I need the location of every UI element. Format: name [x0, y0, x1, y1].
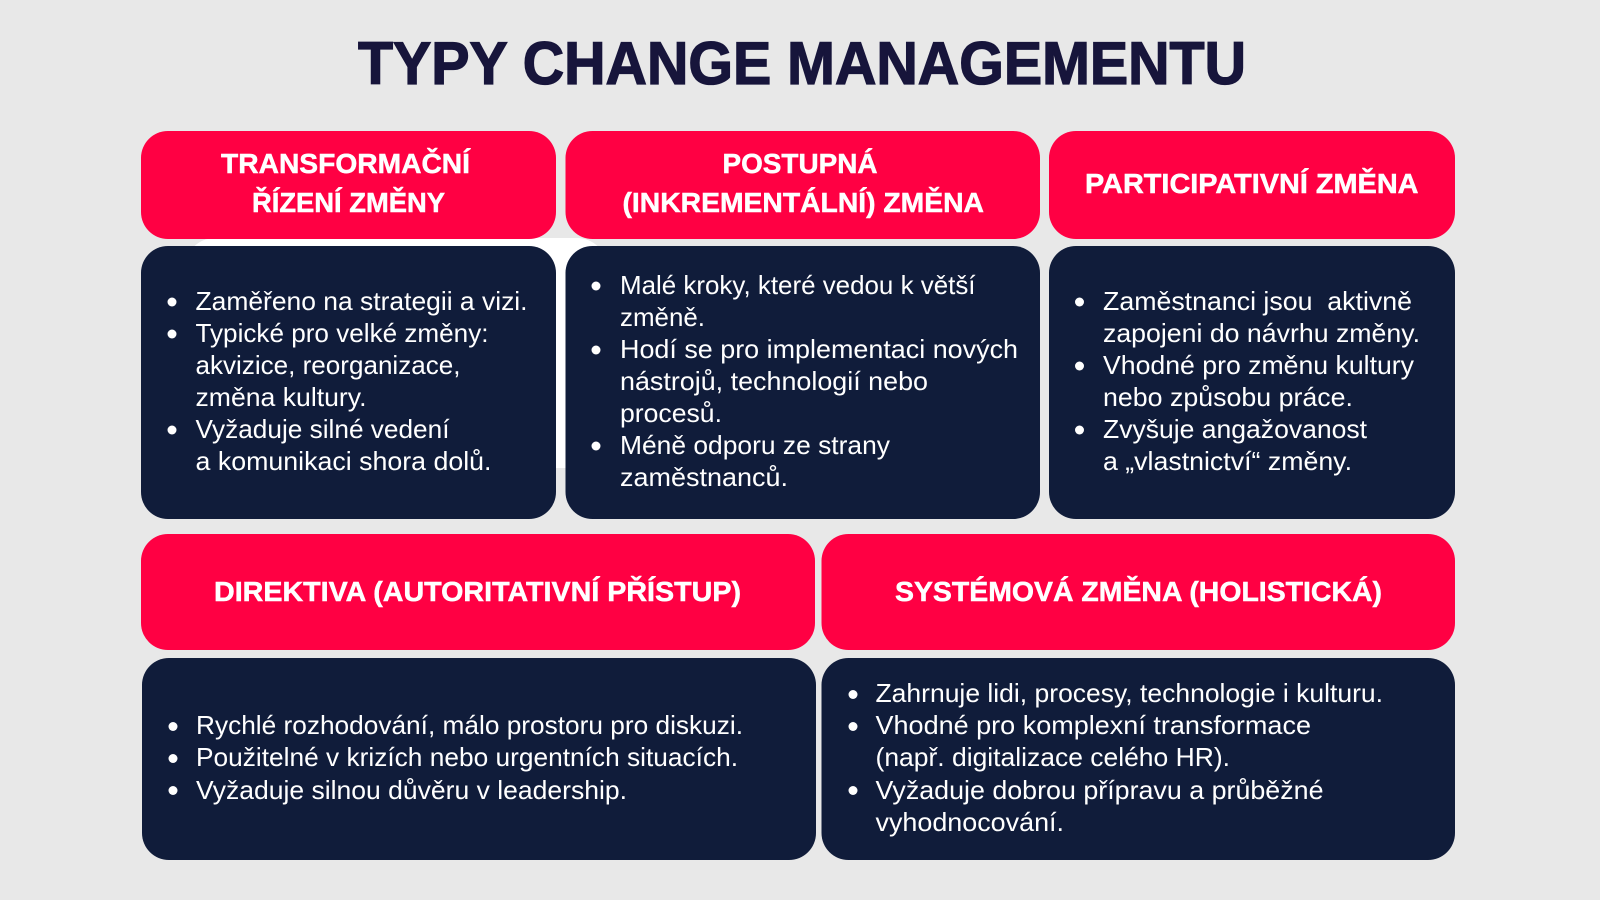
text block: direktiva body: Vyžaduje silnou důvěru v leadership. [196, 775, 627, 805]
text block: transformační body: Typické pro velké změny: [196, 318, 488, 348]
heading: postupná změna: POSTUPNÁ [722, 148, 878, 179]
text block: postupná body: Malé kroky, které vedou k větší [620, 270, 976, 300]
panel: transformační řízení změny [141, 131, 556, 519]
panel: participativní změna [1049, 131, 1455, 519]
text block: postupná body [566, 246, 1040, 519]
text block: participativní body: a „vlastnictví“ změny. [1103, 446, 1352, 476]
text block: direktiva body: Rychlé rozhodování, málo prostoru pro diskuzi. [196, 710, 743, 740]
heading: systémová změna: SYSTÉMOVÁ ZMĚNA (HOLISTICKÁ) [895, 576, 1382, 607]
text block: postupná body: Méně odporu ze strany [620, 430, 890, 460]
text block: direktiva body [142, 658, 816, 860]
heading: transformační řízení změny [141, 131, 556, 239]
text block: participativní body: zapojeni do návrhu změny. [1103, 318, 1420, 348]
text block: participativní body: Zvyšuje angažovanost [1103, 414, 1368, 444]
text block: systémová body [822, 658, 1455, 860]
heading: systémová změna [822, 534, 1455, 650]
text block: direktiva body: Použitelné v krizích nebo urgentních situacích. [196, 742, 738, 772]
text block: transformační body: Zaměřeno na strategii a vizi. [196, 286, 528, 316]
panel: postupná změna [566, 131, 1040, 519]
text block: transformační body: změna kultury. [196, 382, 366, 412]
heading: postupná změna: (INKREMENTÁLNÍ) ZMĚNA [622, 187, 984, 218]
text block: postupná body: zaměstnanců. [620, 462, 788, 492]
text block: postupná body: změně. [620, 302, 705, 332]
text block: participativní body: Zaměstnanci jsou aktivně [1103, 286, 1412, 316]
text block: postupná body: procesů. [620, 398, 722, 428]
panel: systémová změna [822, 534, 1455, 860]
heading: transformační řízení změny: TRANSFORMAČNÍ [221, 147, 471, 179]
text block: systémová body: Zahrnuje lidi, procesy, technologie i kulturu. [876, 678, 1383, 708]
text block: participativní body: nebo způsobu práce. [1103, 382, 1353, 412]
heading: direktiva [141, 534, 815, 650]
panel: direktiva [141, 534, 816, 860]
text block: postupná body: nástrojů, technologií nebo [620, 366, 928, 396]
text block: systémová body: Vyžaduje dobrou přípravu a průběžné [876, 775, 1324, 805]
text block: transformační body: a komunikaci shora dolů. [196, 446, 492, 476]
text block: systémová body: vyhodnocování. [876, 807, 1064, 837]
heading: transformační řízení změny: ŘÍZENÍ ZMĚNY [252, 187, 445, 218]
text block: systémová body: Vhodné pro komplexní transformace [876, 710, 1311, 740]
text block: transformační body: Vyžaduje silné vedení [196, 414, 450, 444]
text block: postupná body: Hodí se pro implementaci nových [620, 334, 1018, 364]
text block: transformační body: akvizice, reorganizace, [196, 350, 460, 380]
heading: direktiva: DIREKTIVA (AUTORITATIVNÍ PŘÍSTUP) [214, 576, 741, 607]
heading: postupná změna [566, 131, 1040, 239]
heading: participativní změna [1049, 131, 1455, 239]
heading: participativní změna: PARTICIPATIVNÍ ZMĚNA [1085, 168, 1418, 199]
text block: systémová body: (např. digitalizace celého HR). [876, 742, 1230, 772]
text block: participativní body: Vhodné pro změnu kultury [1103, 350, 1414, 380]
text block: transformační body [141, 246, 556, 519]
text block: participativní body [1049, 246, 1455, 519]
title: TYPY CHANGE MANAGEMENTU [358, 30, 1246, 97]
